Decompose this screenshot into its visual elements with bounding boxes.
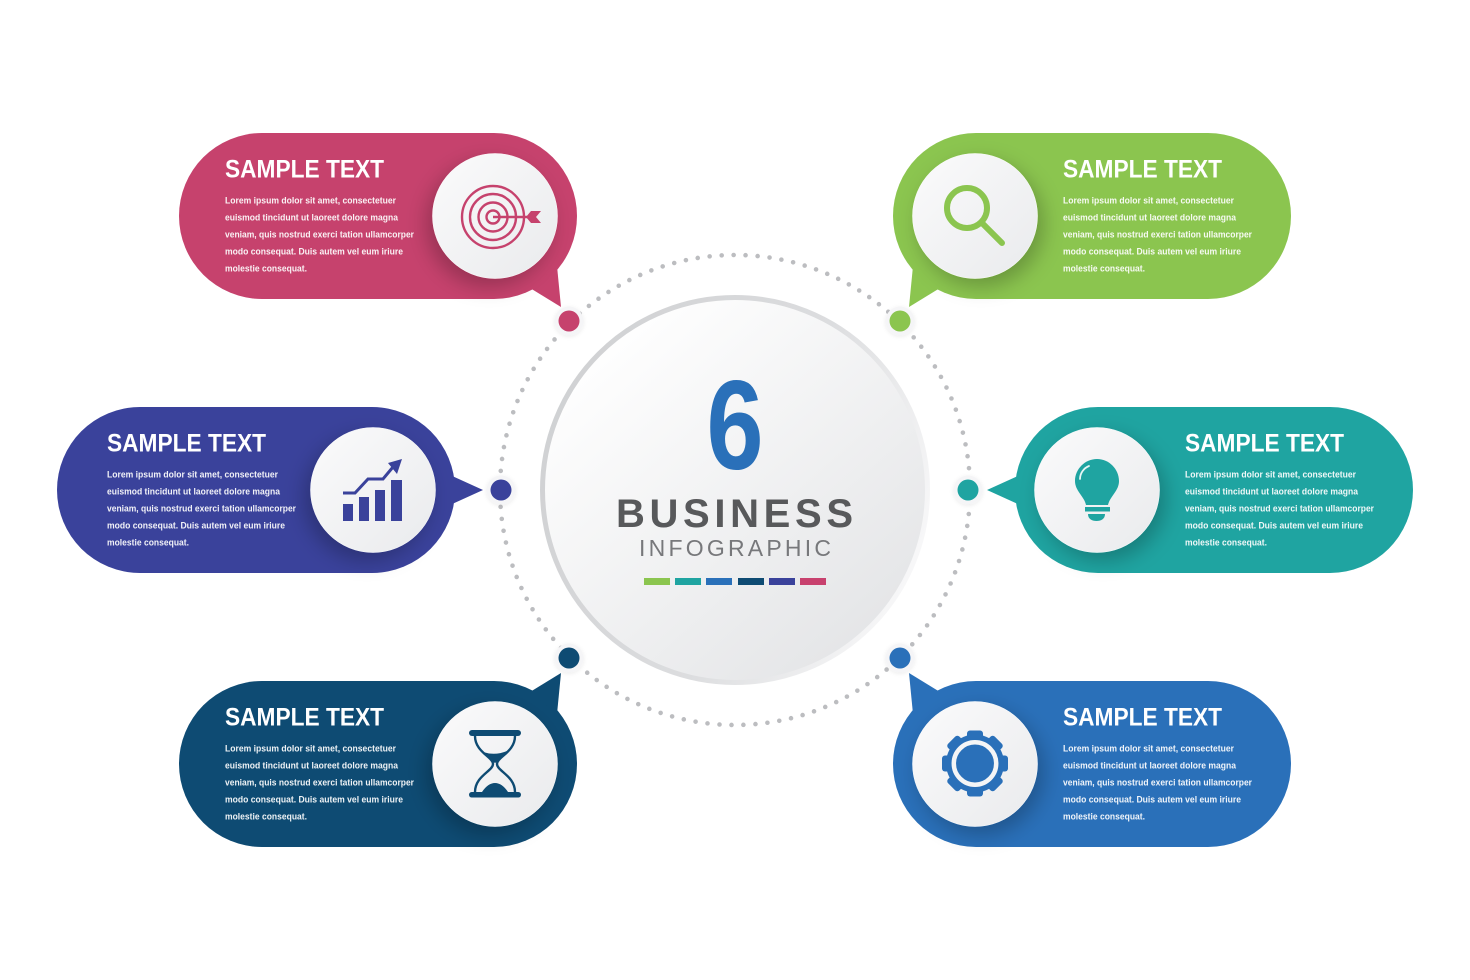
number 6: 6 <box>706 354 764 496</box>
connector node <box>554 306 584 336</box>
body text: euismod tincidunt ut laoreet dolore magna <box>1063 760 1237 772</box>
speech bubble <box>179 673 577 847</box>
icon: gear <box>942 730 1008 796</box>
icon disc <box>912 154 1038 278</box>
body text: modo consequat. Duis autem vel eum iriure <box>1063 246 1241 258</box>
icon: target with arrow <box>462 186 541 248</box>
icon disc <box>912 702 1038 826</box>
body text: molestie consequat. <box>225 264 307 274</box>
icon disc <box>1034 428 1160 552</box>
connector node <box>486 476 516 504</box>
body text: veniam, quis nostrud exerci tation ullamcorper <box>107 504 296 514</box>
panel: navy hourglass <box>179 644 584 847</box>
body text: Lorem ipsum dolor sit amet, consectetuer <box>107 470 278 480</box>
body text <box>1063 744 1252 822</box>
icon: magnifying glass <box>947 188 1002 243</box>
body text: modo consequat. Duis autem vel eum iriure <box>1063 794 1241 806</box>
body text: Lorem ipsum dolor sit amet, consectetuer <box>1063 196 1234 206</box>
title: SAMPLE TEXT <box>1063 704 1222 732</box>
title: SAMPLE TEXT <box>107 430 266 458</box>
body text: euismod tincidunt ut laoreet dolore magna <box>1185 486 1359 498</box>
panel: pink target <box>179 133 584 336</box>
body text: veniam, quis nostrud exerci tation ullamcorper <box>1063 230 1252 240</box>
disc <box>542 298 928 682</box>
body text <box>225 744 414 822</box>
body text <box>1185 470 1374 548</box>
icon: lightbulb <box>1075 459 1119 521</box>
connector node <box>954 476 982 504</box>
icon disc <box>432 154 558 278</box>
body text: modo consequat. Duis autem vel eum iriure <box>1185 520 1363 532</box>
body text <box>107 470 296 548</box>
body text: molestie consequat. <box>1063 812 1145 822</box>
speech bubble <box>987 407 1413 573</box>
body text: molestie consequat. <box>225 812 307 822</box>
speech bubble <box>893 673 1291 847</box>
title: SAMPLE TEXT <box>1185 430 1344 458</box>
icon disc <box>432 702 558 826</box>
body text: molestie consequat. <box>107 538 189 548</box>
body text: Lorem ipsum dolor sit amet, consectetuer <box>1063 744 1234 754</box>
icon disc <box>310 428 436 552</box>
dotted orbit ring <box>500 255 970 725</box>
central circle <box>542 298 928 682</box>
title: SAMPLE TEXT <box>225 704 384 732</box>
title: SAMPLE TEXT <box>225 156 384 184</box>
speech bubble <box>179 133 577 307</box>
icon: growth chart <box>343 459 402 521</box>
body text: molestie consequat. <box>1185 538 1267 548</box>
body text: veniam, quis nostrud exerci tation ullamcorper <box>1185 504 1374 514</box>
body text: euismod tincidunt ut laoreet dolore magna <box>225 760 399 772</box>
body text: veniam, quis nostrud exerci tation ullamcorper <box>225 778 414 788</box>
panel: green search <box>886 133 1291 336</box>
panel: teal lightbulb <box>954 407 1413 573</box>
connector node <box>554 644 584 672</box>
body text: molestie consequat. <box>1063 264 1145 274</box>
body text: modo consequat. Duis autem vel eum iriure <box>225 246 403 258</box>
body text: modo consequat. Duis autem vel eum iriure <box>107 520 285 532</box>
body text: euismod tincidunt ut laoreet dolore magna <box>1063 212 1237 224</box>
title: SAMPLE TEXT <box>1063 156 1222 184</box>
body text: Lorem ipsum dolor sit amet, consectetuer <box>1185 470 1356 480</box>
body text: veniam, quis nostrud exerci tation ullamcorper <box>225 230 414 240</box>
body text: Lorem ipsum dolor sit amet, consectetuer <box>225 744 396 754</box>
connector node <box>886 644 914 672</box>
body text: Lorem ipsum dolor sit amet, consectetuer <box>225 196 396 206</box>
panel: blue gear <box>886 644 1291 847</box>
body text <box>225 196 414 274</box>
speech bubble <box>893 133 1291 307</box>
icon: hourglass <box>469 730 521 798</box>
speech bubble <box>57 407 483 573</box>
heading: business: BUSINESS <box>616 492 853 536</box>
body text: euismod tincidunt ut laoreet dolore magna <box>107 486 281 498</box>
connector node <box>886 306 914 336</box>
body text <box>1063 196 1252 274</box>
body text: euismod tincidunt ut laoreet dolore magna <box>225 212 399 224</box>
colour key bars <box>644 578 826 585</box>
subheading: infographic: INFOGRAPHIC <box>639 535 831 561</box>
body text: veniam, quis nostrud exerci tation ullamcorper <box>1063 778 1252 788</box>
body text: modo consequat. Duis autem vel eum iriure <box>225 794 403 806</box>
panel: indigo chart <box>57 407 516 573</box>
